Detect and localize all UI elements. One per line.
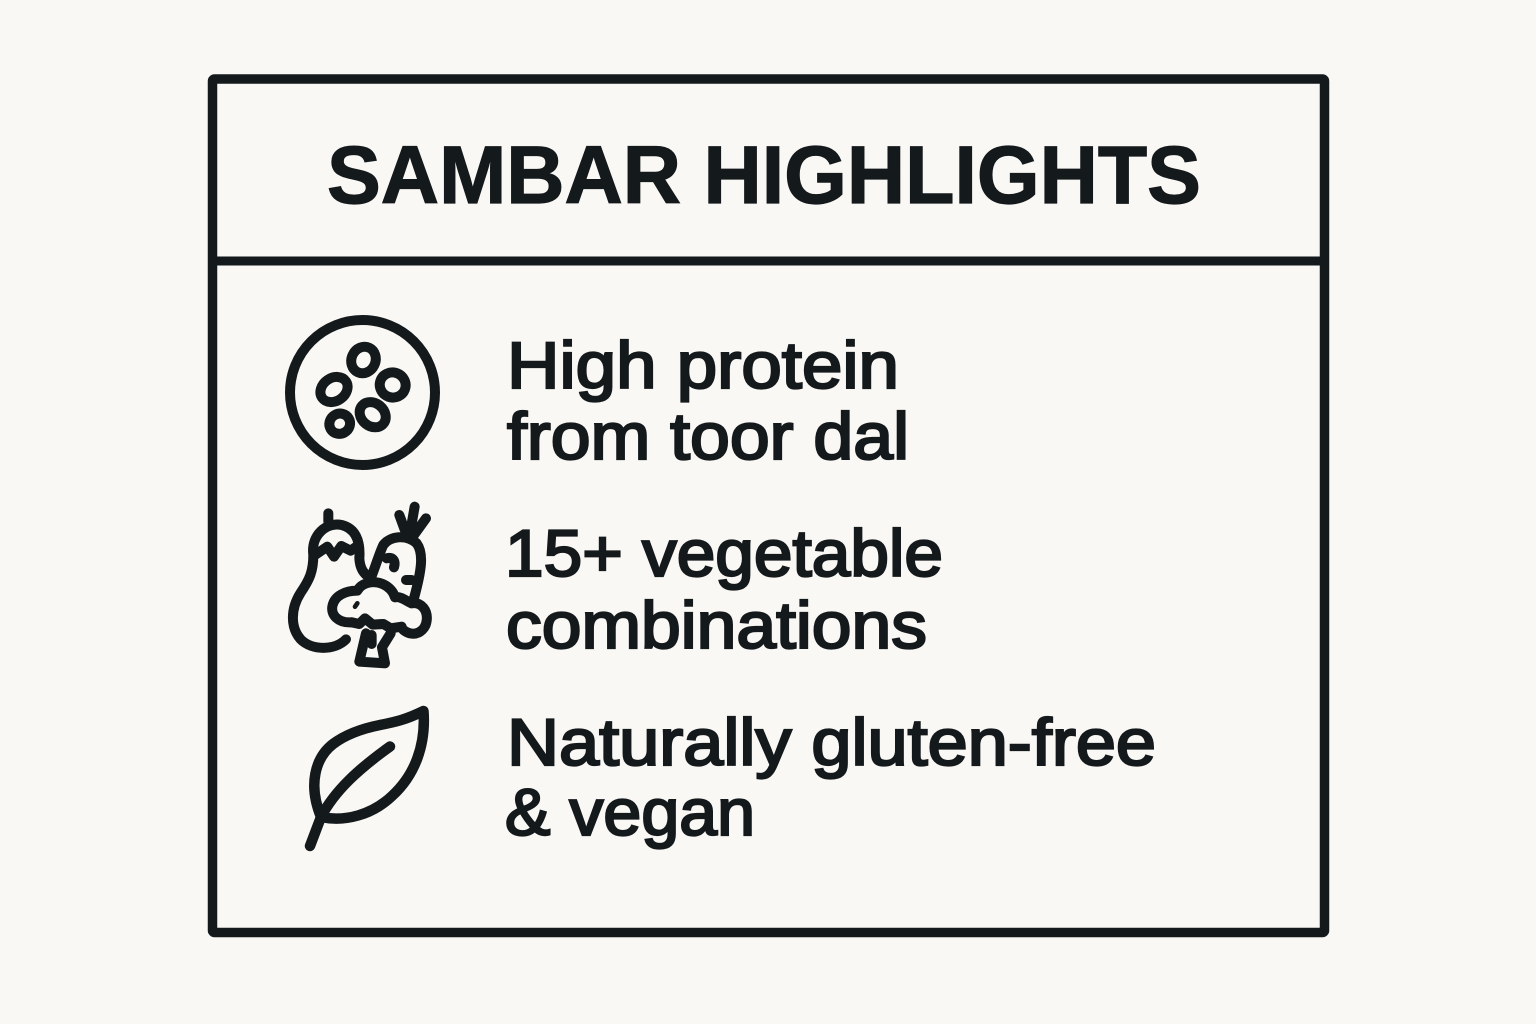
icon: leaf [310,711,424,846]
text: high protein [507,328,909,473]
text: high protein: High protein [507,328,899,402]
text: gluten-free and vegan: Naturally gluten-free [507,705,1156,779]
text: gluten-free and vegan [505,705,1156,849]
icon: vegetables [293,507,427,663]
panel: highlights card [212,79,1325,932]
title: SAMBAR HIGHLIGHTS [327,130,1201,221]
text: high protein: from toor dal [507,399,909,473]
text: vegetable combinations [505,516,943,662]
text: vegetable combinations: 15+ vegetable [505,516,943,590]
text: vegetable combinations: combinations [506,588,927,662]
icon: toor dal lentils in circle [290,320,435,465]
text: gluten-free and vegan: & vegan [505,775,755,849]
